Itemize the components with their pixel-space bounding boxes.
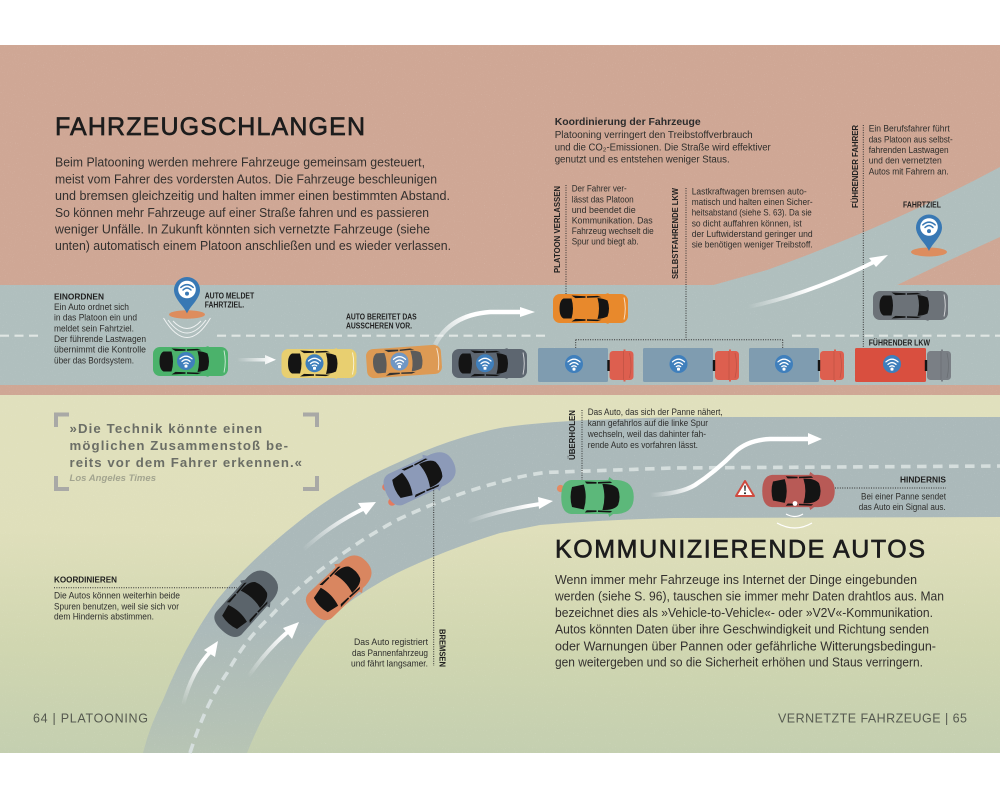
label: Auto bereitet das Ausscheren vor <box>346 312 417 331</box>
curved lower road <box>143 417 1000 753</box>
text block: Einordnen <box>54 291 146 365</box>
car: dark car on the curve <box>207 562 287 644</box>
car: dark platoon car <box>452 348 527 379</box>
text block: Einordnen: übernimmt die Kontrolle <box>54 345 146 355</box>
callout: Überholen: kann gefahrlos auf die linke Spur <box>588 418 708 428</box>
arrow: overtaking manoeuvre <box>650 433 822 495</box>
text block: Koordinierung der Fahrzeuge: Koordinierung der Fahrzeuge <box>555 116 701 128</box>
text block: Einordnen: über das Bordsystem. <box>54 355 134 365</box>
callout: Koordinieren: Spuren benutzen, weil sie sich vor <box>54 601 179 611</box>
diagonal exit road <box>710 167 1000 286</box>
callout: Führender Fahrer: das Platoon aus selbst- <box>869 134 953 144</box>
callout: Selbstfahrende LKW: SELBSTFAHRENDE LKW <box>670 187 680 279</box>
callout: Platoon verlassen: Der Fahrer ver- <box>572 184 627 194</box>
callout: Bremsen <box>351 488 448 669</box>
panel: green ground lower half <box>0 395 1000 753</box>
text block: Einordnen: in das Platoon ein und <box>54 313 137 323</box>
label: Auto meldet Fahrtziel: FAHRTZIEL. <box>205 300 244 309</box>
callout: Führender Fahrer <box>850 124 953 355</box>
text block: platooning introduction: So können mehr Fahrzeuge auf einer Straße fahren und es passieren <box>55 205 429 220</box>
callout: Bremsen: und fährt langsamer. <box>351 659 428 669</box>
callout: Selbstfahrende LKW <box>576 186 813 350</box>
car: broken-down red car <box>762 472 835 528</box>
text block: platooning introduction: Beim Platooning werden mehrere Fahrzeuge gemeinsam gesteuert, <box>55 155 425 170</box>
text block: V2V communication: oder Warnungen über Pannen oder gefährliche Witterungsbedingun- <box>555 638 936 653</box>
callout: Platoon verlassen: Fahrzeug wechselt die <box>572 226 654 236</box>
callout: Bremsen: das Pannenfahrzeug <box>352 648 428 658</box>
callout: Koordinieren: dem Hindernis abstimmen. <box>54 612 154 622</box>
text block: platooning introduction: weniger Unfälle. In Zukunft könnten sich vernetzte Fahrzeuge (siehe <box>54 222 430 236</box>
text block: Koordinierung der Fahrzeuge: Platooning verringert den Treibstoffverbrauch <box>555 130 753 141</box>
text block: V2V communication: Autos könnten Daten über ihre Geschwindigkeit und Richtung senden <box>555 622 929 637</box>
car: orange car on the curve <box>299 547 380 627</box>
callout: Überholen <box>567 407 723 480</box>
callout: Hindernis: Bei einer Panne sendet <box>861 491 946 501</box>
quote with corner brackets: »Die Technik könnte einen <box>70 421 262 436</box>
text block: platooning introduction: meist vom Fahrer des vordersten Autos. Die Fahrzeuge beschleunigen <box>55 171 437 186</box>
callout: Platoon verlassen <box>552 184 654 298</box>
car: green overtaking car <box>557 477 634 517</box>
lane markings on the curved road <box>190 466 1000 753</box>
footer: right page number: VERNETZTE FAHRZEUGE | 65 <box>778 712 967 726</box>
label: Fahrtziel: FAHRTZIEL <box>903 200 941 209</box>
callout: Führender Fahrer: Autos mit Fahrern an. <box>869 167 949 177</box>
text block: Einordnen: Der führende Lastwagen <box>54 334 146 344</box>
label: Auto meldet Fahrtziel: AUTO MELDET <box>205 291 254 300</box>
callout: Hindernis: HINDERNIS <box>900 474 946 484</box>
callout: Selbstfahrende LKW: sie benötigen weniger Treibstoff. <box>692 240 813 250</box>
callout: Koordinieren: Die Autos können weiterhin beide <box>54 590 180 600</box>
callout: Selbstfahrende LKW: der Luftwiderstand geringer und <box>692 229 813 239</box>
label: Führender LKW: FÜHRENDER LKW <box>869 338 931 348</box>
icon: warning triangle <box>736 481 754 496</box>
label: Auto bereitet das Ausscheren vor: AUTO BEREITET DAS <box>346 312 417 321</box>
text block: platooning introduction <box>54 155 451 253</box>
car: blue braking car <box>378 444 462 512</box>
text block: platooning introduction: unten) automatisch einem Platoon anschließen und es wieder verlassen. <box>55 238 451 253</box>
text block: Koordinierung der Fahrzeuge: genutzt und es entstehen weniger Staus. <box>555 155 730 166</box>
callout: Koordinieren: KOORDINIEREN <box>54 575 117 585</box>
footer: left page number: 64 | PLATOONING <box>33 712 148 726</box>
text block: platooning introduction: und bremsen gleichzeitig und halten immer einen bestimmten Abstand. <box>55 188 450 203</box>
callout: Führender Fahrer: fahrenden Lastwagen <box>869 145 949 155</box>
text block: Einordnen: EINORDNEN <box>54 291 104 301</box>
label: Auto bereitet das Ausscheren vor: AUSSCHEREN VOR. <box>346 322 412 331</box>
lane markings on the straight road <box>0 335 1000 337</box>
text block: Koordinierung der Fahrzeuge: und die CO₂-Emissionen. Die Straße wird effektiver <box>555 142 771 153</box>
callout: Führender Fahrer: und den vernetzten <box>869 156 942 166</box>
title: Kommunizierende Autos: KOMMUNIZIERENDE AUTOS <box>555 536 925 564</box>
callout: Hindernis: das Auto ein Signal aus. <box>859 502 946 512</box>
quote with corner brackets: reits vor dem Fahrer erkennen.« <box>70 455 302 470</box>
text block: V2V communication: gen weitergeben und so die Sicherheit erhöhen und Staus verringern. <box>555 655 923 670</box>
quote with corner brackets: Los Angeles Times <box>70 473 156 484</box>
arrow: joining <box>237 355 276 364</box>
callout: Überholen: ÜBERHOLEN <box>567 410 577 460</box>
label: Auto meldet Fahrtziel <box>205 291 254 309</box>
callout: Platoon verlassen: und beendet die <box>572 205 636 215</box>
truck: first self-driving truck <box>538 348 634 382</box>
quote with corner brackets: möglichen Zusammenstoß be- <box>70 438 288 453</box>
arrows on the curved road <box>183 497 553 705</box>
panel: pink ground upper half <box>0 45 1000 395</box>
car: green joining car <box>153 346 228 377</box>
text block: Koordinierung der Fahrzeuge <box>555 116 771 166</box>
callout: Platoon verlassen: PLATOON VERLASSEN <box>552 186 562 273</box>
callout: Selbstfahrende LKW: heitsabstand (siehe S. 63). Da sie <box>692 208 812 218</box>
car: yellow platoon car <box>282 348 356 379</box>
text block: Einordnen: meldet sein Fahrtziel. <box>54 323 134 333</box>
truck: leading truck <box>855 348 951 382</box>
callout: Bremsen: BREMSEN <box>438 629 448 667</box>
callout: Selbstfahrende LKW: Lastkraftwagen bremsen auto- <box>692 186 807 196</box>
callout: Überholen: rende Auto es vorfahren lässt. <box>588 440 698 450</box>
callout: Führender Fahrer: Ein Berufsfahrer führt <box>869 124 950 134</box>
truck: third self-driving truck <box>749 348 844 382</box>
car: grey car ahead <box>873 290 948 321</box>
text block: V2V communication <box>554 572 944 670</box>
callout: Selbstfahrende LKW: so dicht auffahren können, ist <box>692 218 802 228</box>
arrow: exit to destination <box>748 255 888 307</box>
callout: Bremsen: Das Auto registriert <box>354 637 428 647</box>
icon: pin with signal waves <box>164 277 210 338</box>
callout: Selbstfahrende LKW: matisch und halten einen Sicher- <box>692 197 813 207</box>
callout: Koordinieren <box>54 575 237 622</box>
callout: Hindernis <box>835 474 946 512</box>
text block: V2V communication: werden (siehe S. 96), tauschen sie immer mehr Daten drahtlos aus. Man <box>554 588 944 603</box>
arrow: swing out <box>435 307 535 345</box>
text block: V2V communication: Wenn immer mehr Fahrzeuge ins Internet der Dinge eingebunden <box>555 572 917 587</box>
callout: Überholen: Das Auto, das sich der Panne nähert, <box>588 407 723 417</box>
callout: Platoon verlassen: lässt das Platoon <box>572 194 634 204</box>
callout: Führender Fahrer: FÜHRENDER FAHRER <box>850 125 860 208</box>
title: Fahrzeugschlangen: FAHRZEUGSCHLANGEN <box>55 113 365 141</box>
car: tan car preparing to leave <box>366 344 442 379</box>
quote with corner brackets <box>56 414 317 489</box>
car: orange car that left <box>553 293 628 324</box>
truck: second self-driving truck <box>643 348 739 382</box>
callout: Platoon verlassen: Kommunikation. Das <box>572 215 653 225</box>
icon: destination pin <box>911 214 947 256</box>
callout: Platoon verlassen: Spur und biegt ab. <box>572 237 639 247</box>
callout: Überholen: wechseln, weil das dahinter fah- <box>587 429 706 439</box>
text block: Einordnen: Ein Auto ordnet sich <box>54 302 129 312</box>
straight platoon road <box>0 285 1000 385</box>
text block: V2V communication: bezeichnet dies als »Vehicle-to-Vehicle«- oder »V2V«-Kommunikation. <box>555 605 933 620</box>
